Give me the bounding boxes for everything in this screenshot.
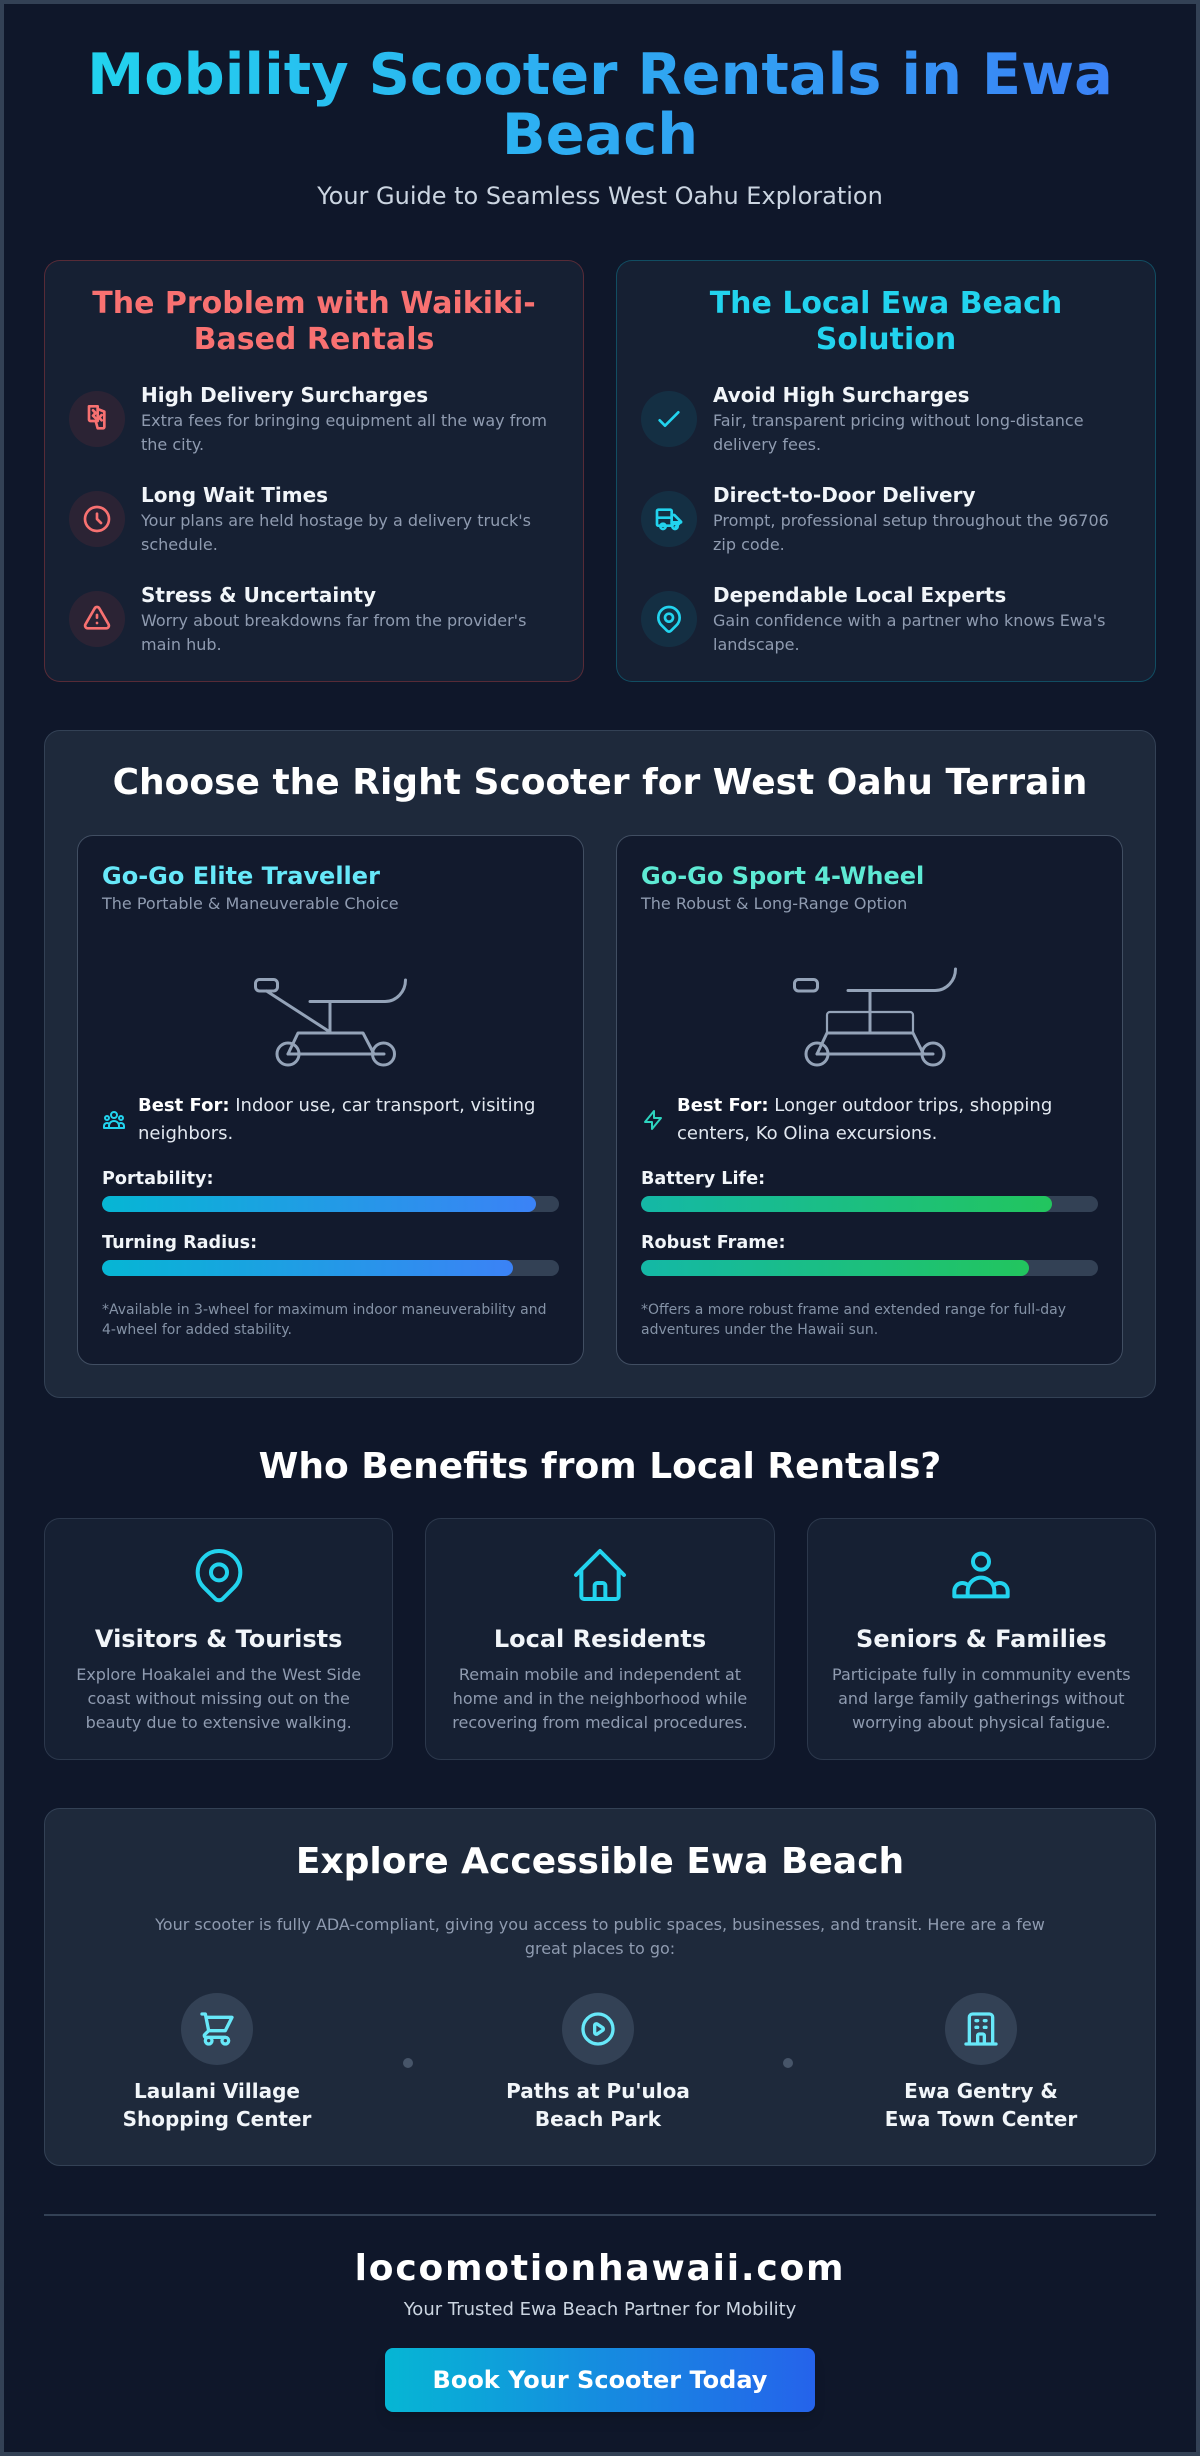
item: high delivery surcharges: [69, 383, 547, 454]
bar: battery life 90%: [641, 1196, 1098, 1212]
place name: [885, 2079, 1078, 2131]
illustration: scooter: [793, 968, 957, 1066]
description: Your scooter is fully ADA-compliant, giving you access to public spaces, businesses, and transit. Here are a few great places to go:: [155, 1915, 1045, 1958]
place name: Beach Park: [535, 2107, 661, 2131]
model name: Go-Go Elite Traveller: [102, 862, 380, 890]
card text: Explore Hoakalei and the West Side coast without missing out on the beauty due to extensive walking.: [76, 1665, 361, 1732]
label: robust frame: Robust Frame:: [641, 1233, 786, 1253]
places row: [123, 1993, 1078, 2131]
bar: robust frame 85%: [641, 1260, 1098, 1276]
card text: Remain mobile and independent at home and in the neighborhood while recovering from medical procedures.: [452, 1665, 748, 1732]
place name: Paths at Pu'uloa: [506, 2079, 690, 2103]
text: direct to door delivery: Direct-to-Door Delivery: [713, 483, 976, 507]
panel: visitors and tourists: [44, 1518, 393, 1760]
place name: [506, 2079, 690, 2131]
text: stress and uncertainty: [141, 583, 526, 654]
text: long wait times: Your plans are held hostage by a delivery truck's schedule.: [141, 511, 531, 554]
text: dependable local experts: Gain confidence with a partner who knows Ewa's landscape.: [713, 611, 1105, 654]
text: long wait times: Long Wait Times: [141, 483, 328, 507]
icon: clock: [69, 491, 125, 547]
heading: problem: Based Rentals: [194, 322, 434, 357]
card title: Seniors & Families: [856, 1625, 1107, 1653]
text: avoid high surcharges: Fair, transparent pricing without long-distance delivery fees.: [713, 411, 1084, 454]
item: avoid high surcharges: [641, 383, 1084, 454]
heading: choose scooter: Choose the Right Scooter for West Oahu Terrain: [113, 762, 1087, 803]
place name: Ewa Town Center: [885, 2107, 1077, 2131]
heading: problem: The Problem with Waikiki-: [92, 286, 536, 321]
icon: home: [574, 1548, 626, 1601]
title: Mobility Scooter Rentals in Ewa: [87, 41, 1113, 108]
benefit cards: [44, 1518, 1156, 1760]
icon: play circle: [562, 1993, 634, 2065]
panel: choose the right scooter: [44, 730, 1156, 1398]
model tagline: The Portable & Maneuverable Choice: [102, 894, 399, 913]
footer: [44, 2214, 1156, 2412]
text: high delivery surcharges: Extra fees for bringing equipment all the way from the city.: [141, 411, 547, 454]
text: stress and uncertainty: Worry about breakdowns far from the provider's main hub.: [141, 611, 526, 654]
heading: problem: [92, 286, 536, 357]
title: [87, 41, 1113, 168]
place: Pu'uloa: [506, 1993, 690, 2131]
label: turning radius: Turning Radius:: [102, 1233, 257, 1253]
heading: who benefits: Who Benefits from Local Rentals?: [259, 1446, 941, 1487]
icon: warning triangle: [69, 591, 125, 647]
card title: Local Residents: [494, 1625, 706, 1653]
icon: truck: [641, 491, 697, 547]
best for: [644, 1095, 1052, 1144]
text: high delivery surcharges: High Delivery Surcharges: [141, 383, 428, 407]
label: battery life: Battery Life:: [641, 1169, 765, 1189]
icon: group: [103, 1111, 125, 1129]
place: Laulani Village: [123, 1993, 312, 2131]
rating bars: [102, 1169, 559, 1276]
item: stress and uncertainty: [69, 583, 526, 654]
item: dependable local experts: [641, 583, 1105, 654]
panel: Go-Go Elite Traveller: [77, 835, 584, 1365]
place name: Laulani Village: [134, 2079, 300, 2103]
icon: shopping cart: [181, 1993, 253, 2065]
card title: Visitors & Tourists: [95, 1625, 342, 1653]
connector dot: [783, 2058, 793, 2068]
footnote: *Offers a more robust frame and extended range for full-day adventures under the Hawaii sun.: [641, 1302, 1066, 1338]
rating bars: [641, 1169, 1098, 1276]
header: [87, 41, 1113, 210]
icon: map pin: [641, 591, 697, 647]
item: direct to door delivery: [641, 483, 1109, 554]
panel: problem: [44, 260, 584, 682]
subtitle: Your Guide to Seamless West Oahu Exploration: [317, 182, 883, 210]
text: direct to door delivery: Prompt, professional setup throughout the 96706 zip code.: [713, 511, 1109, 554]
footnote: *Available in 3-wheel for maximum indoor maneuverability and 4-wheel for added stability.: [102, 1302, 546, 1338]
text: avoid high surcharges: Avoid High Surcharges: [713, 383, 970, 407]
icon: map pin: [196, 1549, 242, 1602]
heading: solution: The Local Ewa Beach: [710, 286, 1062, 321]
panel: Go-Go Sport 4-Wheel: [616, 835, 1123, 1365]
panel: solution: [616, 260, 1156, 682]
place name: [123, 2079, 312, 2131]
text: avoid high surcharges: [713, 383, 1084, 454]
icon: surcharge bills: [69, 391, 125, 447]
panel: seniors and families: [807, 1518, 1156, 1760]
best for: [103, 1095, 535, 1144]
best for text: Best For: Indoor use, car transport, visiting neighbors.: [138, 1095, 535, 1144]
icon: check: [641, 391, 697, 447]
best for text: Best For: Longer outdoor trips, shopping centers, Ko Olina excursions.: [677, 1095, 1052, 1144]
heading: solution: Solution: [816, 322, 956, 357]
label: portability: Portability:: [102, 1169, 214, 1189]
website: locomotionhawaii.com: [355, 2248, 845, 2289]
place name: Ewa Gentry &: [904, 2079, 1058, 2103]
model name: Go-Go Sport 4-Wheel: [641, 862, 924, 890]
place name: Shopping Center: [123, 2107, 311, 2131]
text: direct to door delivery: [713, 483, 1109, 554]
scooter cards: [77, 835, 1123, 1365]
icon: family: [952, 1552, 1010, 1598]
call to action button: Book Your Scooter Today: [433, 2366, 767, 2394]
text: high delivery surcharges: [141, 383, 547, 454]
connector dot: [403, 2058, 413, 2068]
text: dependable local experts: [713, 583, 1105, 654]
bar: turning radius 90%: [102, 1260, 559, 1276]
place: Ewa Gentry: [885, 1993, 1078, 2131]
heading: solution: [710, 286, 1062, 357]
text: long wait times: [141, 483, 531, 554]
call to action button: [385, 2348, 815, 2412]
panel: explore accessible ewa beach: [44, 1808, 1156, 2166]
tagline: Your Trusted Ewa Beach Partner for Mobility: [404, 2299, 796, 2320]
text: dependable local experts: Dependable Local Experts: [713, 583, 1006, 607]
bar: portability 95%: [102, 1196, 559, 1212]
text: stress and uncertainty: Stress & Uncertainty: [141, 583, 376, 607]
icon: lightning bolt: [644, 1110, 662, 1130]
card text: Participate fully in community events and large family gatherings without worrying about physical fatigue.: [832, 1665, 1131, 1732]
title: Beach: [502, 101, 698, 168]
icon: office building: [945, 1993, 1017, 2065]
model tagline: The Robust & Long-Range Option: [641, 894, 907, 913]
heading: explore: Explore Accessible Ewa Beach: [296, 1841, 904, 1882]
panel: local residents: [425, 1518, 775, 1760]
illustration: scooter: [254, 978, 407, 1066]
comparison row: [44, 260, 1156, 682]
item: long wait times: [69, 483, 531, 554]
